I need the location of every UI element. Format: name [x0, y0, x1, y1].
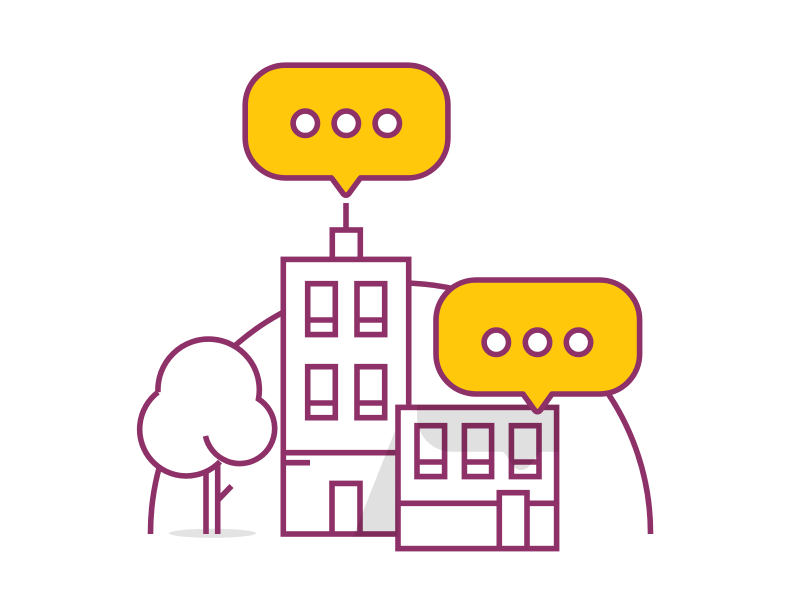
small building door: [499, 493, 527, 549]
typing dots: [293, 111, 317, 136]
speech bubble: top: [245, 65, 448, 195]
tree trunk: [206, 462, 232, 534]
typing dots: [484, 330, 508, 354]
tall building body: [283, 259, 409, 534]
roof box: [332, 230, 360, 260]
small building band: [398, 500, 557, 506]
ground floor lines: [283, 453, 409, 463]
antenna: [343, 203, 349, 230]
small building body: [398, 407, 557, 549]
speech bubble: lower right: [436, 280, 640, 412]
shadow of small building: [353, 431, 398, 537]
tall building: [283, 230, 409, 534]
small building windows: [417, 426, 539, 477]
ground shadow under tree: [169, 529, 256, 538]
tall building windows: [308, 284, 385, 418]
shadow of lower bubble: [417, 405, 559, 470]
icon: tree: [140, 339, 275, 534]
tall building door: [332, 483, 360, 534]
small building: [398, 407, 557, 549]
bubble body: [436, 280, 640, 412]
hill arch behind buildings: [150, 283, 650, 534]
bubble body: [245, 65, 448, 195]
tree crown outline: [140, 339, 275, 476]
cast shadows: [353, 405, 559, 537]
tree crown fill: [140, 339, 275, 476]
